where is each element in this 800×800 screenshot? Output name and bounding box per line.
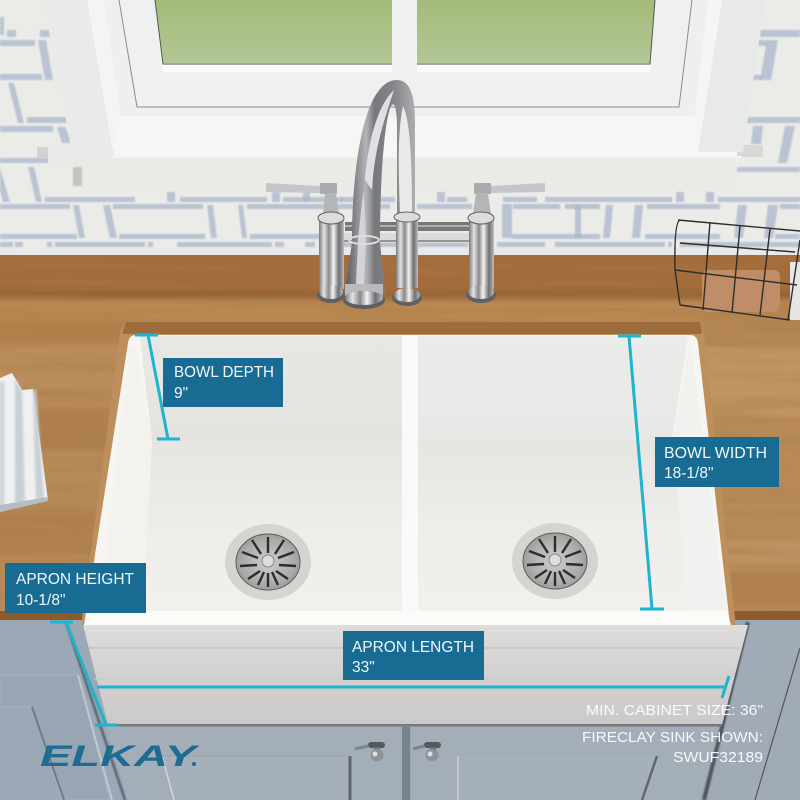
window glass right (417, 0, 655, 63)
door right panel (458, 756, 657, 800)
door left (106, 726, 402, 800)
left drain (225, 524, 311, 600)
faucet (266, 80, 545, 309)
towel (0, 373, 48, 512)
window sill (37, 116, 763, 186)
label: apron length: APRON LENGTH (352, 639, 474, 656)
right post and handle (466, 183, 545, 303)
logo: Elkay: ELKAY (40, 740, 201, 773)
left bowl (99, 336, 402, 612)
right bowl (418, 336, 726, 610)
dimension line: bowl width (618, 336, 664, 609)
bowl divider (402, 336, 418, 612)
window glass left (155, 0, 392, 63)
left cabinet panel (0, 675, 110, 800)
label: apron length: 33" (352, 659, 375, 676)
right window trim (698, 0, 765, 152)
sink (82, 322, 748, 726)
wall with tile pattern (0, 0, 800, 255)
label: apron length (343, 631, 484, 680)
cabinet (0, 620, 800, 800)
label: apron height: 10-1/8" (16, 592, 65, 609)
label: bowl width: 18-1/8" (664, 465, 713, 482)
window (87, 0, 722, 152)
label: apron height: APRON HEIGHT (16, 571, 135, 588)
note: fireclay sink model: SWUF32189 (673, 749, 763, 766)
door left panel (162, 756, 351, 800)
right drain (512, 523, 598, 599)
plain wall under sill (82, 157, 735, 191)
wire basket (675, 220, 800, 320)
right side cabinet (706, 622, 800, 800)
countertop front edge (0, 611, 800, 622)
note: minimum cabinet size: MIN. CABINET SIZE: 36" (586, 702, 763, 719)
apron (83, 625, 748, 726)
front rim (84, 611, 731, 625)
left window trim (43, 0, 113, 152)
label: apron height (5, 563, 146, 613)
spout highlights (356, 90, 412, 285)
note: fireclay sink model: FIRECLAY SINK SHOWN: (582, 729, 763, 746)
soap bar (702, 270, 780, 312)
crossbars (340, 222, 475, 243)
label: bowl depth: 9" (174, 385, 188, 402)
label: bowl width (655, 437, 779, 487)
label: bowl depth (163, 358, 283, 407)
note: fireclay sink model (582, 729, 763, 766)
dimension line: bowl depth (135, 335, 180, 439)
label: bowl depth: BOWL DEPTH (174, 364, 274, 381)
left post and handle (266, 183, 345, 303)
right trim moulding (695, 0, 722, 152)
item behind basket (790, 262, 800, 320)
dimension line: apron height (50, 622, 117, 725)
countertop (0, 245, 800, 622)
cabinet knob left (355, 742, 385, 762)
left trim moulding (87, 0, 120, 152)
label: bowl width: BOWL WIDTH (664, 445, 767, 462)
spout (345, 80, 415, 292)
center post (392, 212, 422, 306)
dimension line: apron length (97, 676, 729, 698)
door right (411, 726, 722, 800)
cabinet knob right (413, 742, 441, 762)
logo: Elkay (40, 740, 201, 773)
spout base (343, 236, 385, 309)
